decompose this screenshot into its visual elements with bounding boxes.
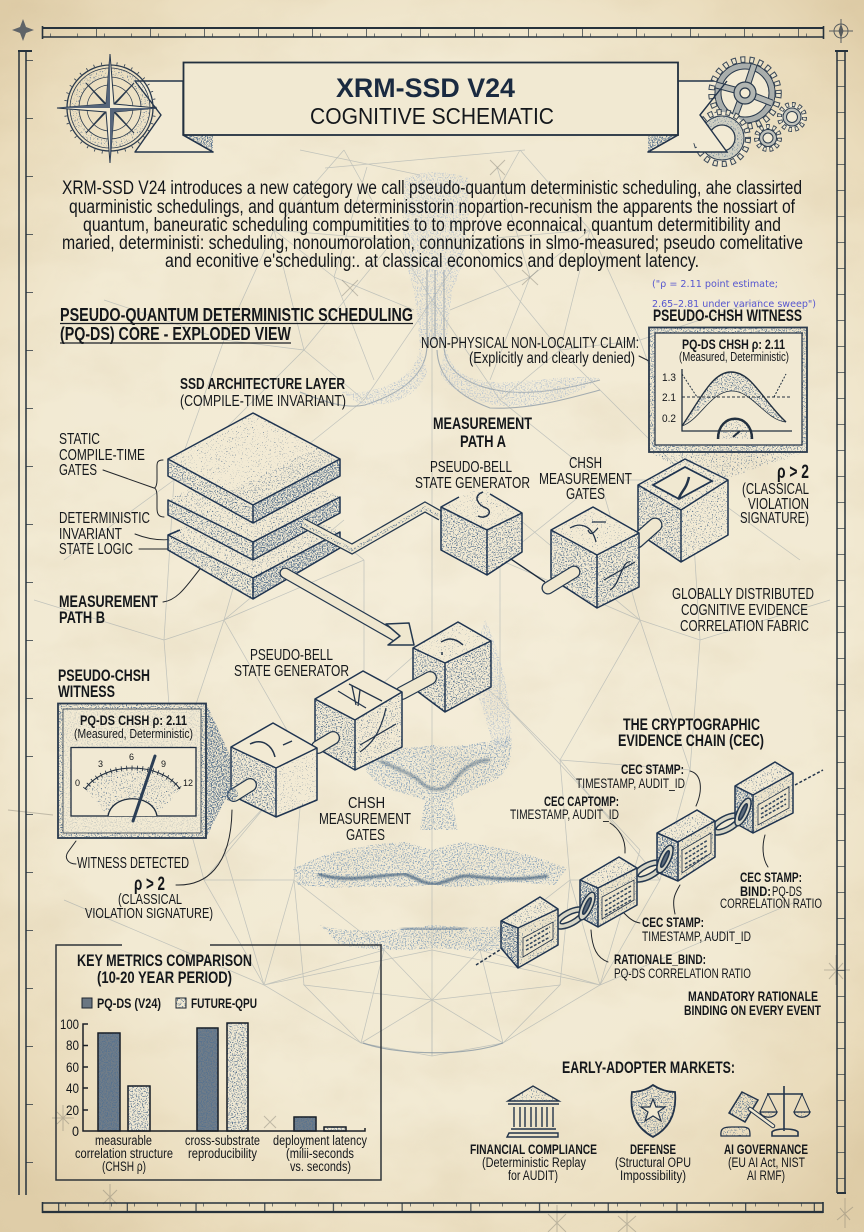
market text: defense: Impossibility) (620, 1168, 686, 1183)
label: rationale bind: PQ-DS CORRELATION RATIO (614, 966, 751, 981)
gauge dial fill and scale: 3 (98, 759, 103, 769)
compass main star (57, 54, 157, 163)
y-axis labels: 80 (66, 1037, 79, 1053)
icon: temple (507, 1086, 559, 1137)
label: CEC stamp bind: BIND: (740, 884, 771, 899)
ruler body (42, 26, 824, 39)
nostril dark shading (380, 760, 490, 789)
label: measurement path B: PATH B (59, 609, 105, 627)
gauge subheading: (Measured, Deterministic) (74, 726, 193, 741)
gauge perspective side (206, 703, 230, 838)
label: measurement path A: MEASUREMENT (433, 415, 532, 433)
projection cone (649, 452, 807, 478)
x-axis label 3 (273, 1133, 367, 1174)
compass ring stipple (74, 72, 146, 144)
pipe between CHSH cube and witness cube (637, 525, 655, 541)
label: non-physical non-locality claim: NON-PHYSICAL NON-LOCALITY CLAIM: (421, 335, 639, 352)
label: globally distributed fabric (672, 586, 814, 635)
label: CEC captomp: TIMESTAMP, AUDIT_ID (510, 807, 619, 822)
icon: gears (680, 60, 804, 164)
lower pseudo-Bell cube (413, 622, 491, 712)
market text: financial compliance: FINANCIAL COMPLIANCE (470, 1142, 597, 1157)
label: deterministic invariant state logic: DETERMINISTIC (59, 510, 150, 527)
mini gauge (718, 419, 752, 439)
label: pseudo-bell state generator top: STATE GENERATOR (415, 475, 530, 492)
label: pseudo-CHSH witness left (58, 667, 150, 701)
label: CEC stamp lower: TIMESTAMP, AUDIT_ID (642, 929, 751, 944)
monitor frame (649, 328, 807, 452)
label: mandatory rationale binding: MANDATORY RATIONALE (688, 988, 818, 1004)
icon: compass rose (57, 54, 157, 163)
panel title: (10-20 YEAR PERIOD) (97, 969, 232, 987)
x-axis label 2 (185, 1133, 260, 1161)
mouth line (318, 874, 548, 884)
market text: defense: (Structural OPU (615, 1155, 691, 1170)
SSD architecture layer stack (168, 413, 340, 599)
section: early-adopter markets (470, 1059, 810, 1183)
evidence block 4 (735, 762, 793, 833)
label: CEC stamp bind: CORRELATION RATIO (720, 896, 822, 911)
label: measurement path A: PATH A (460, 433, 506, 451)
lower CHSH cube A (224, 723, 317, 817)
compass diagonal arms (86, 83, 134, 133)
label: measurement path B: MEASUREMENT (59, 593, 158, 611)
label: CEC captomp: CEC CAPTOMP: (544, 794, 619, 809)
arrow: path A pipe (303, 507, 441, 550)
nose side stipple (470, 620, 512, 750)
label: mandatory rationale binding: BINDING ON EVERY EVENT (684, 1002, 821, 1018)
evidence block 2 (580, 857, 637, 927)
label: static compile-time gates: GATES (59, 462, 97, 479)
label: rho greater than two lower: VIOLATION SIGNATURE) (85, 905, 213, 922)
label: CEC stamp top (576, 762, 700, 806)
top plate (168, 413, 340, 523)
label: witness detected: WITNESS DETECTED (77, 855, 189, 872)
legend: FUTURE-QPU (191, 995, 257, 1011)
x-axis label 1: correlation structure (75, 1146, 173, 1161)
x-axis label 2: cross-substrate (185, 1133, 260, 1148)
panel: analog gauge witness (58, 703, 230, 838)
bars (98, 1023, 346, 1131)
label: non-physical non-locality claim: (Explicitly and clearly denied) (469, 350, 635, 367)
label: deterministic invariant state logic: STATE LOGIC (59, 541, 133, 558)
label: static compile-time gates (59, 431, 164, 517)
blue annotation: 2.65–2.81 under variance sweep") (652, 299, 816, 310)
label: CEC stamp top: CEC STAMP: (621, 762, 684, 777)
label: CEC stamp bind (720, 835, 822, 911)
label: CHSH measurement gates top: GATES (566, 486, 605, 503)
heading: cryptographic evidence chain: THE CRYPTOGRAPHIC (623, 716, 760, 734)
nose stipple (360, 735, 511, 830)
banner title: XRM-SSD V24 (336, 73, 515, 103)
label: measurement path B (59, 563, 205, 627)
markets heading: EARLY-ADOPTER MARKETS: (562, 1059, 735, 1077)
label: CEC stamp lower: CEC STAMP: (642, 915, 704, 930)
label: globally distributed fabric: GLOBALLY DISTRIBUTED (672, 586, 814, 603)
label: pseudo-CHSH witness left: WITNESS (58, 683, 115, 701)
x-axis label 1 (75, 1133, 173, 1174)
small gear bottom (756, 126, 780, 150)
label: static compile-time gates: STATIC (59, 431, 100, 448)
label: SSD architecture layer: (COMPILE-TIME INVARIANT) (180, 393, 346, 410)
label: CEC stamp top: TIMESTAMP, AUDIT_ID (576, 776, 685, 791)
upper witness cube (638, 459, 728, 562)
label: rho greater than two top (740, 462, 809, 527)
label: rho greater than two lower (85, 810, 232, 922)
label: rho greater than two top: SIGNATURE) (740, 510, 809, 527)
bottom ruler (42, 1202, 823, 1213)
blue annotation (652, 279, 816, 310)
label: rho greater than two top: (CLASSICAL (742, 481, 809, 498)
background: wireframe face (34, 150, 830, 1056)
corner diamond ornament (12, 19, 34, 41)
label: rho greater than two lower: (CLASSICAL (118, 891, 182, 908)
pipe between lower cubes left (318, 738, 333, 747)
curve chart: 2.1 (662, 392, 676, 404)
gauge dial fill and scale: 6 (129, 752, 134, 762)
panel border (56, 945, 381, 1180)
chain tail lines (476, 770, 823, 965)
label: witness detected (66, 841, 189, 872)
market text: defense: DEFENSE (630, 1142, 676, 1157)
middle plate (168, 455, 340, 560)
lips stipple (293, 842, 567, 951)
label: pseudo-bell state generator lower (234, 647, 349, 680)
gauge needle (133, 756, 155, 821)
heading: cryptographic evidence chain: EVIDENCE CHAIN (CEC) (618, 732, 764, 750)
label: CHSH measurement gates top: MEASUREMENT (539, 471, 632, 488)
legend: PQ-DS (V24) (97, 995, 161, 1011)
panel title (77, 952, 252, 987)
banner folds (183, 135, 678, 152)
x-axis label 3: deployment latency (273, 1133, 367, 1148)
y-axis labels: 20 (66, 1102, 79, 1118)
label: SSD architecture layer (180, 376, 346, 410)
gauge heading: PQ-DS CHSH ρ: 2.11 (80, 712, 187, 728)
label: rationale bind (591, 930, 751, 981)
label: CHSH measurement gates lower: MEASUREMENT (319, 811, 411, 828)
gauge dial fill and scale: 0 (75, 778, 80, 788)
axes (83, 1024, 365, 1131)
panel: key metrics comparison (56, 945, 381, 1180)
gauge inner plate (63, 709, 201, 833)
label: pseudo-CHSH witness left: PSEUDO-CHSH (58, 667, 150, 685)
large gear (712, 60, 778, 126)
lower lip dark band (402, 928, 465, 930)
label: CHSH measurement gates lower (319, 795, 411, 844)
label: pseudo-bell state generator lower: STATE GENERATOR (234, 663, 349, 680)
market text: AI governance (724, 1142, 808, 1183)
market text: financial compliance: for AUDIT) (508, 1168, 558, 1183)
lower gear (680, 81, 748, 164)
connector between upper cubes (499, 551, 574, 588)
label: pseudo-CHSH witness top: PSEUDO-CHSH WITNESS (653, 306, 802, 325)
brow stipple (342, 345, 600, 406)
bar chart (60, 1016, 367, 1174)
label: CEC stamp lower (620, 885, 751, 944)
market text: AI governance: AI GOVERNANCE (724, 1142, 808, 1157)
chin curve (363, 1043, 503, 1053)
label: pseudo-bell state generator top: PSEUDO-BELL (430, 459, 512, 476)
banner tails (135, 81, 727, 152)
label: CHSH measurement gates top (539, 455, 632, 503)
panel title: KEY METRICS COMPARISON (77, 952, 252, 970)
label: mandatory rationale binding (684, 988, 821, 1018)
label: SSD architecture layer: SSD ARCHITECTURE LAYER (180, 376, 345, 393)
forehead stipple column (402, 172, 469, 345)
gauge dial (71, 748, 196, 816)
cube probe stub (234, 785, 250, 795)
witness subheading: (Measured, Deterministic) (679, 350, 789, 364)
intro paragraph (62, 178, 803, 272)
label: CEC stamp bind: CEC STAMP: (740, 870, 802, 885)
blue annotation: ("ρ = 2.11 point estimate; (652, 279, 778, 290)
label: deterministic invariant state logic: INVARIANT (59, 526, 122, 543)
label: rho greater than two lower: ρ > 2 (134, 874, 165, 895)
label: rho greater than two top: VIOLATION (748, 496, 809, 513)
label: CHSH measurement gates lower: CHSH (348, 795, 385, 812)
label: pseudo-bell state generator top (415, 459, 530, 492)
arrow: path B pipe (285, 573, 414, 645)
compass rings (65, 63, 155, 153)
face mesh lines (34, 150, 830, 1056)
witness heading: PQ-DS CHSH ρ: 2.11 (682, 336, 785, 352)
chain horizontal links (550, 808, 746, 934)
lower CHSH cube B (315, 671, 402, 770)
x-axis label 1: (CHSH ρ) (102, 1159, 146, 1174)
upper pseudo-Bell generator cube (441, 486, 522, 575)
label: pseudo-bell state generator lower: PSEUDO-BELL (250, 647, 333, 664)
right vertical ruler (835, 50, 848, 1193)
label: globally distributed fabric: COGNITIVE EVIDENCE (681, 602, 808, 619)
label: non-physical non-locality claim (421, 335, 649, 367)
label: CEC stamp bind: PQ-DS (772, 884, 802, 899)
legend (82, 995, 257, 1011)
market text: financial compliance (470, 1142, 597, 1183)
intro paragraph: and econitive e'scheduling:. at classical economics and deployment latency. (165, 251, 699, 272)
curve chart: 1.3 (662, 372, 676, 384)
nose bridge and brow curves (300, 270, 600, 408)
x-axis label 3: vs. seconds) (290, 1159, 351, 1174)
market text: AI governance: AI RMF) (747, 1168, 785, 1183)
corner compass ornament (829, 19, 853, 43)
label: globally distributed fabric: CORRELATION FABRIC (680, 618, 809, 635)
y-axis labels: 40 (66, 1080, 79, 1096)
cryptographic chain (476, 762, 823, 968)
y-axis labels: 0 (72, 1123, 79, 1139)
label: CEC captomp (510, 794, 625, 853)
x-axis label 1: measurable (95, 1133, 152, 1148)
heading: cryptographic evidence chain (618, 716, 764, 750)
section heading: PQ-DS core: PSEUDO-QUANTUM DETERMINISTIC SCHEDULING (60, 305, 413, 325)
x-axis label 3: (milii-seconds (286, 1146, 354, 1161)
title banner (135, 62, 727, 152)
bottom plate (168, 510, 340, 599)
icon: shield (631, 1085, 675, 1137)
banner main panel (184, 62, 678, 135)
market text: defense (615, 1142, 691, 1183)
upper CHSH gate cube (551, 507, 639, 608)
market text: financial compliance: (Deterministic Replay (482, 1155, 586, 1170)
panel: pseudo-CHSH witness chart (649, 328, 807, 478)
y-axis labels: 100 (60, 1016, 79, 1032)
label: static compile-time gates: COMPILE-TIME (59, 447, 145, 464)
label: CHSH measurement gates top: CHSH (569, 455, 602, 472)
top ruler with corner ornaments (12, 19, 853, 43)
label: rationale bind: RATIONALE_BIND: (614, 952, 706, 967)
x-axis label 2: reproducibility (188, 1146, 257, 1161)
market text: AI governance: (EU AI Act, NIST (728, 1155, 805, 1170)
pipe between lower cubes right (402, 678, 430, 693)
small gear top (780, 104, 804, 130)
left vertical ruler (18, 50, 32, 1195)
gauge frame (58, 704, 206, 838)
label: deterministic invariant state logic (59, 510, 208, 558)
section heading: PQ-DS core (60, 305, 413, 344)
section heading: PQ-DS core: (PQ-DS) CORE - EXPLODED VIEW (60, 324, 291, 344)
gauge dial fill and scale: 12 (183, 778, 193, 788)
y-axis labels: 60 (66, 1059, 79, 1075)
label: rho greater than two top: ρ > 2 (777, 462, 809, 483)
curve chart (662, 369, 792, 431)
gauge dial fill and scale: 9 (161, 759, 166, 769)
monitor screen (655, 333, 802, 445)
chain hook links (576, 796, 754, 922)
label: CHSH measurement gates lower: GATES (346, 827, 385, 844)
gauge dial fill and scale (75, 752, 193, 816)
curve chart: 0.2 (662, 413, 676, 425)
y-axis labels (60, 1016, 79, 1139)
icon: gavel and scales (721, 1086, 810, 1136)
evidence block 3 (657, 810, 715, 881)
label: measurement path A (433, 415, 532, 451)
banner subtitle: COGNITIVE SCHEMATIC (310, 103, 554, 129)
evidence block 1 (501, 897, 558, 968)
